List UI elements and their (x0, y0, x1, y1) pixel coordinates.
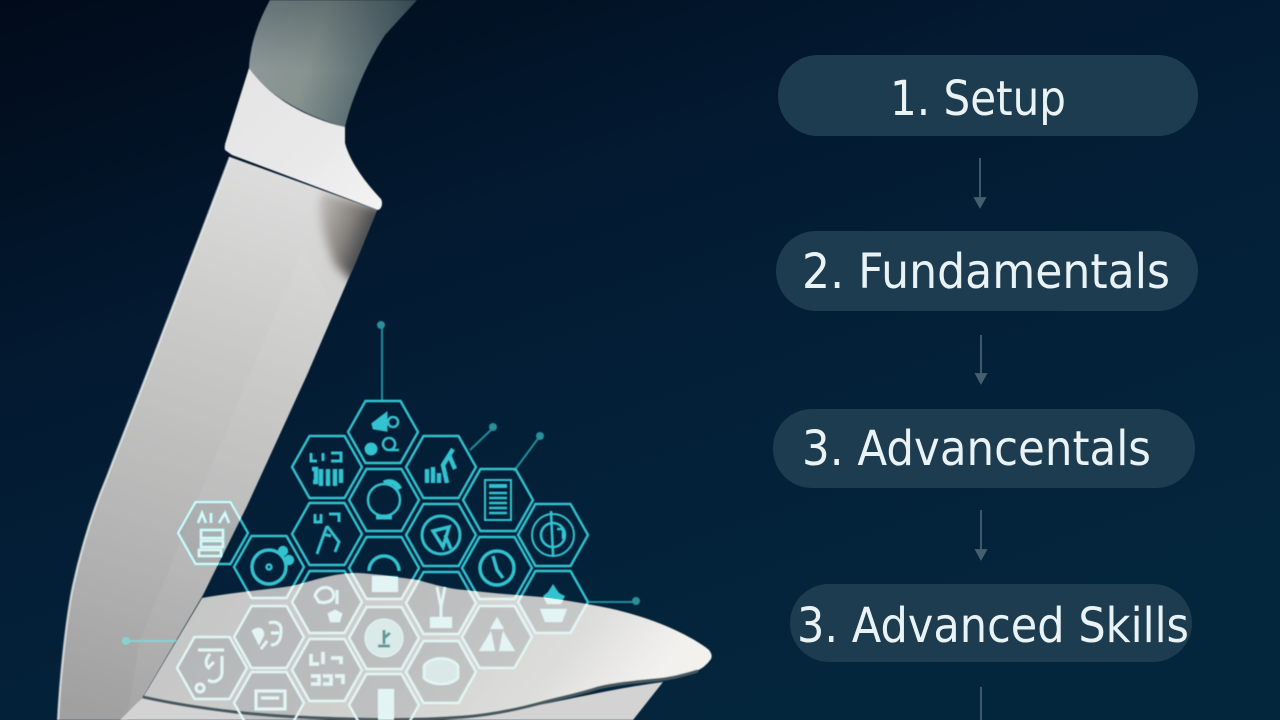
hexagons over knife and bowl (122, 500, 588, 720)
connector lines (377, 321, 640, 605)
step 1 pill (778, 55, 1198, 136)
knife (58, 0, 417, 720)
arrow 1 to 2 (975, 158, 985, 207)
step 1 label: 1. Setup (890, 71, 1066, 127)
bowl lower body (120, 682, 663, 720)
knife handle (249, 0, 417, 127)
mixing bowl (120, 573, 712, 720)
knife blade (58, 157, 395, 720)
step 2 label: 2. Fundamentals (802, 244, 1170, 300)
arrow 2 to 3 (976, 335, 986, 383)
bowl rim surface (143, 573, 712, 720)
hexagon icon cluster (177, 321, 640, 720)
arrow continuing down (980, 687, 982, 720)
bowl rim shadow line (143, 671, 698, 720)
step 4 pill (790, 584, 1192, 662)
arrow 3 to 4 (976, 510, 986, 559)
step 4 label: 3. Advanced Skills (797, 598, 1189, 654)
step 2 pill (776, 231, 1198, 311)
knife bolster (225, 68, 382, 210)
left connector over blade (122, 637, 178, 645)
step 3 label: 3. Advancentals (802, 421, 1151, 477)
step 3 pill (773, 409, 1195, 488)
pale hexagon layer (176, 500, 588, 720)
hexagons over dark background (177, 401, 588, 720)
